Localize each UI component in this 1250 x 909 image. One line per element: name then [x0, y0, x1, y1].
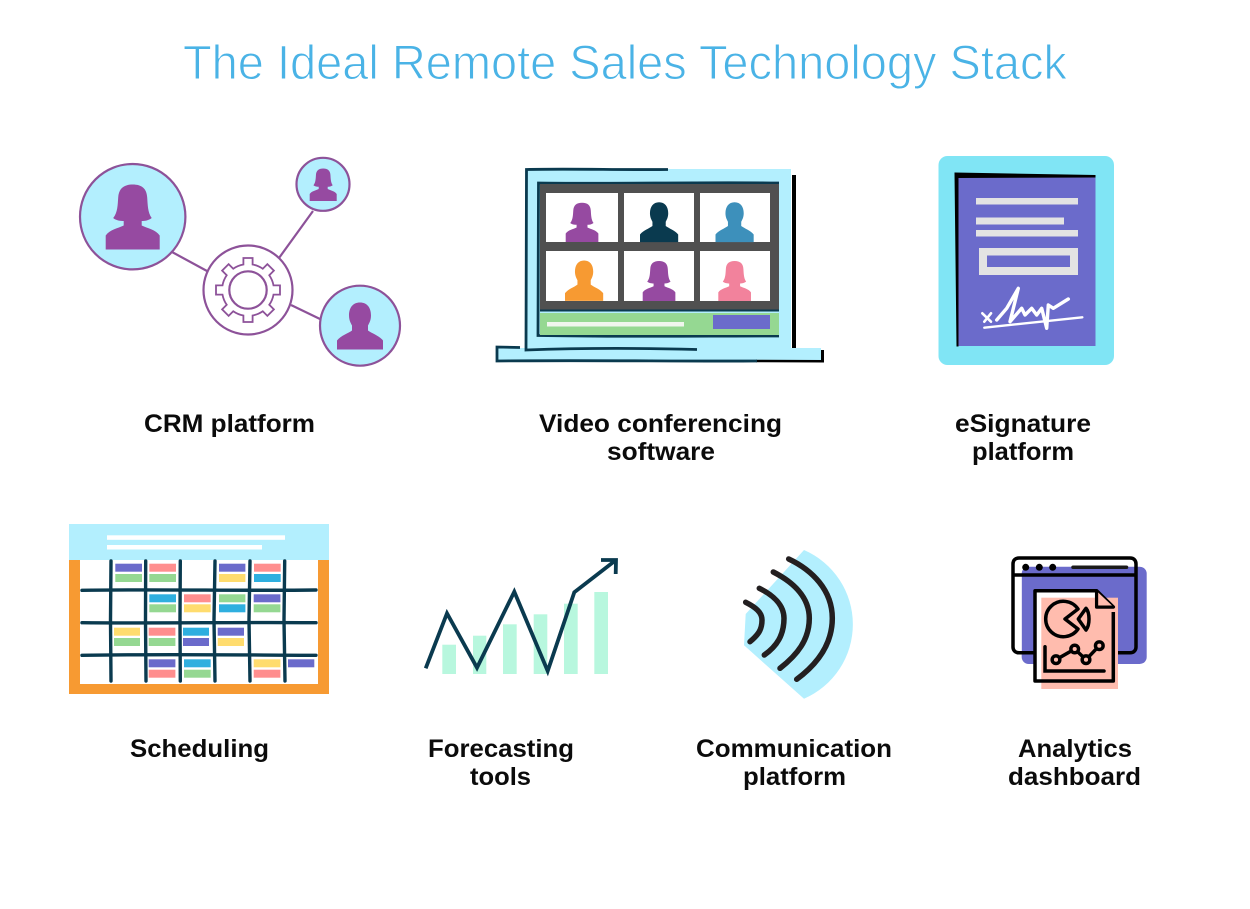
label: Video conferencing software — [539, 410, 782, 466]
panel: Video conferencing software — [497, 169, 824, 466]
panel: Communication platform — [696, 550, 892, 791]
icon: analytics report — [1013, 558, 1147, 689]
icon: CRM network — [80, 158, 400, 366]
icon: gear hub — [204, 246, 292, 334]
title: The Ideal Remote Sales Technology Stack — [183, 37, 1068, 90]
icon: large female contact — [80, 164, 185, 269]
browser window — [1013, 558, 1136, 653]
label: eSignature platform: platform — [972, 438, 1074, 466]
icon: calendar — [69, 524, 329, 694]
icon: small female contact — [296, 158, 350, 211]
panel: Forecasting tools — [426, 560, 616, 791]
label: Scheduling: Scheduling — [130, 735, 269, 763]
icon: signal waves — [744, 550, 853, 699]
pie chart — [1046, 601, 1089, 637]
label: Analytics dashboard — [1008, 735, 1141, 791]
bars — [442, 592, 608, 674]
signature — [982, 288, 1082, 328]
icon: forecast chart — [426, 560, 616, 674]
participants — [565, 202, 754, 301]
label: Forecasting tools: tools — [470, 763, 531, 791]
line chart — [1045, 642, 1104, 671]
icon: male contact — [320, 286, 400, 366]
panel: Analytics dashboard — [1008, 558, 1147, 791]
label: Communication platform: platform — [743, 763, 846, 791]
label: eSignature platform: eSignature — [955, 410, 1091, 438]
video tiles — [546, 193, 770, 301]
label: Video conferencing software: software — [607, 438, 715, 466]
label: eSignature platform — [955, 410, 1091, 466]
panel: eSignature platform — [938, 156, 1114, 466]
calendar events — [114, 564, 314, 678]
trend arrow — [426, 560, 616, 671]
panel: CRM platform — [80, 158, 400, 438]
label: Forecasting tools — [428, 735, 574, 791]
label: Communication platform — [696, 735, 892, 791]
label: Communication platform: Communication — [696, 735, 892, 763]
calendar grid — [82, 561, 316, 681]
label: Video conferencing software: Video conferencing — [539, 410, 782, 438]
panel: Scheduling — [69, 524, 329, 763]
label: Analytics dashboard: Analytics — [1018, 735, 1132, 763]
label: Forecasting tools: Forecasting — [428, 735, 574, 763]
label: Analytics dashboard: dashboard — [1008, 763, 1141, 791]
icon: laptop with video call — [497, 169, 824, 362]
label: CRM platform: CRM platform — [144, 410, 315, 438]
icon: signed document — [938, 156, 1114, 365]
report page — [1035, 591, 1118, 689]
